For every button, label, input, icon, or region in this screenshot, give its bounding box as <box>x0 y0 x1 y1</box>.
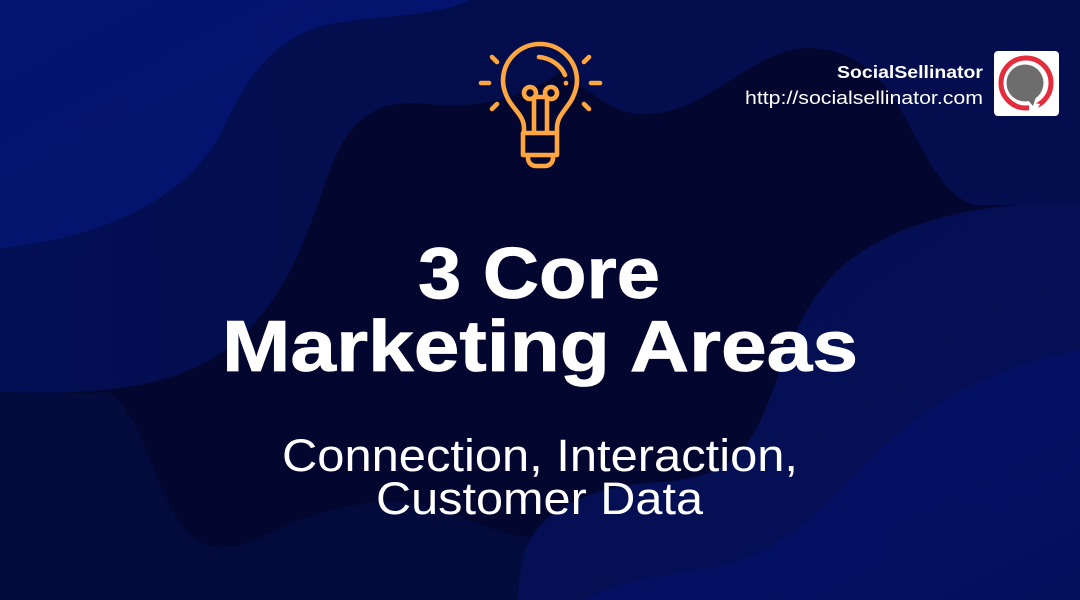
brand url: http://socialsellinator.com <box>745 88 983 108</box>
logo <box>994 51 1059 116</box>
subtitle: Connection, Interaction, <box>282 430 798 481</box>
blob: upper left mid layer <box>0 0 1080 393</box>
title: Marketing Areas <box>222 307 858 387</box>
blob: lower right bright <box>585 350 1080 600</box>
icon: light bulb <box>481 44 600 166</box>
title: 3 Core <box>418 234 660 314</box>
blob: top right darker corner <box>557 0 1080 205</box>
subtitle <box>282 430 798 524</box>
blob: lower right <box>518 204 1080 600</box>
title <box>222 234 858 387</box>
subtitle: Customer Data <box>376 473 704 524</box>
brand name: SocialSellinator <box>837 62 983 82</box>
blob: bottom left <box>0 392 530 600</box>
blob: upper left bright <box>0 0 470 248</box>
